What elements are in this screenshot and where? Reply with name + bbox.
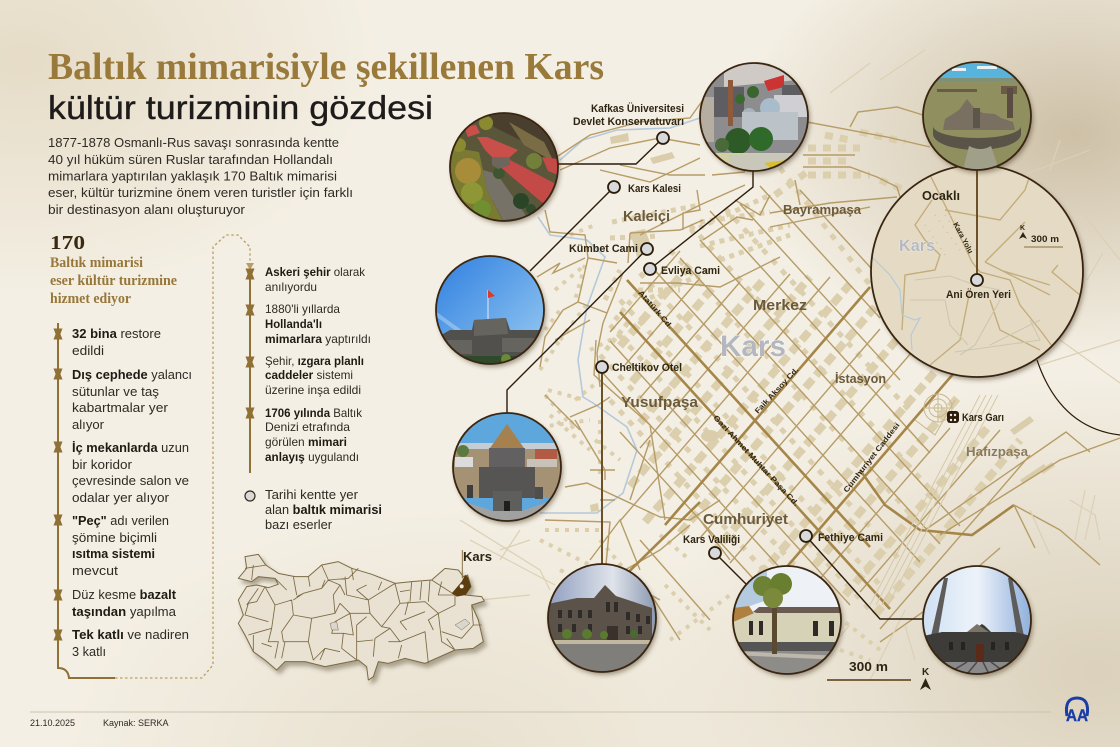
map markers and place labels: Kars Valiliği bbox=[683, 534, 740, 546]
map markers and place labels: Kafkas Üniversitesi bbox=[591, 102, 684, 115]
main street labels: Atatürk Cd. bbox=[636, 288, 675, 331]
right feature list: görülen mimari bbox=[265, 435, 347, 449]
inset circle: Ani map: Ani Ören Yeri bbox=[946, 288, 1011, 301]
right feature list bbox=[265, 265, 371, 464]
connector: Ani bbox=[976, 170, 978, 280]
date and source: Kaynak: SERKA bbox=[103, 718, 169, 728]
legend: alan baltık mimarisi bbox=[265, 502, 382, 517]
footer line bbox=[30, 711, 1051, 713]
subheading: 170: 170 bbox=[50, 232, 85, 254]
scale bar and north arrow: K bbox=[922, 667, 930, 678]
left feature list: Tek katlı ve nadiren bbox=[72, 627, 189, 642]
main street labels bbox=[636, 288, 902, 508]
photo: Kafkas Üniversitesi Devlet Konservatuvarı bbox=[450, 113, 558, 221]
legend: bazı eserler bbox=[265, 517, 333, 532]
Kars province bbox=[452, 575, 471, 597]
left feature list: taşından yapılma bbox=[72, 604, 177, 619]
main street labels: Faik Aksoy Cd. bbox=[753, 365, 800, 415]
inset circle: Ani map bbox=[871, 165, 1083, 377]
right feature list: Hollanda'lı bbox=[265, 317, 322, 331]
photo: Kümbet Cami bbox=[453, 413, 561, 521]
left feature list: edildi bbox=[72, 343, 104, 358]
map markers and place labels bbox=[569, 102, 983, 559]
map markers and place labels: Fethiye Cami bbox=[818, 532, 883, 544]
AA logo: AA bbox=[1066, 706, 1088, 725]
right feature list: caddeler sistemi bbox=[265, 368, 353, 382]
buildings bbox=[520, 132, 1055, 660]
neighbourhood labels bbox=[621, 203, 1029, 528]
inset circle: Ani map: Kara Yolu bbox=[951, 221, 975, 255]
intro paragraph: 40 yıl hüküm süren Ruslar tarafından Hollandalı bbox=[48, 152, 333, 167]
frame: dashed and solid timeline border bbox=[58, 235, 254, 678]
inset labels: Ocaklı bbox=[922, 188, 960, 203]
inset circle: Ani map: Kars bbox=[899, 236, 935, 255]
map markers and place labels: Evliya Cami bbox=[661, 265, 720, 277]
left feature list: alıyor bbox=[72, 417, 105, 432]
subheading: 170: eser kültür turizmine bbox=[50, 273, 177, 289]
main street labels: Gazi Ahmet Muhtar Paşa Cd. bbox=[712, 413, 801, 508]
left feature list: sütunlar ve taş bbox=[72, 384, 160, 399]
list markers bbox=[54, 268, 254, 640]
right feature list: anılıyordu bbox=[265, 280, 317, 294]
right feature list: 1706 yılında Baltık bbox=[265, 406, 363, 420]
neighbourhood labels: Yusufpaşa bbox=[621, 394, 699, 411]
subheading: 170: hizmet ediyor bbox=[50, 291, 131, 307]
legend bbox=[245, 487, 382, 532]
photo: Cheltikov Otel bbox=[548, 564, 656, 672]
scale bar and north arrow: 300 m bbox=[849, 659, 888, 674]
right feature list: üzerine inşa edildi bbox=[265, 383, 361, 397]
inset north and scale: K bbox=[1020, 225, 1025, 232]
intro paragraph: bir destinasyon alanı oluşturuyor bbox=[48, 202, 246, 217]
left feature list: İç mekanlarda uzun bbox=[72, 440, 189, 455]
photo: Kars Valiliği bbox=[733, 566, 841, 674]
left feature list: bir koridor bbox=[72, 457, 133, 472]
left feature list: 32 bina restore bbox=[72, 326, 161, 341]
map markers and place labels: Kümbet Cami bbox=[569, 243, 638, 255]
neighbourhood labels: İstasyon bbox=[835, 371, 886, 386]
map markers and place labels: Kars Kalesi bbox=[628, 183, 681, 195]
date and source bbox=[30, 718, 169, 728]
main street labels: Cumhuriyet Caddesi bbox=[841, 421, 902, 494]
neighbourhood labels: Merkez bbox=[753, 297, 807, 314]
left feature list: kabartmalar yer bbox=[72, 400, 169, 415]
photo: Fethiye Cami bbox=[923, 566, 1031, 674]
AA logo bbox=[1066, 698, 1088, 725]
Kars locator label: Kars bbox=[463, 549, 492, 564]
left feature list: 3 katlı bbox=[72, 644, 106, 659]
scale bar and north arrow bbox=[827, 659, 931, 690]
photo: Ani Ören Yeri bbox=[923, 62, 1031, 170]
left feature list: çevresinde salon ve bbox=[72, 473, 189, 488]
subheading: 170: Baltık mimarisi bbox=[50, 255, 143, 271]
left feature list: "Peç" adı verilen bbox=[72, 513, 169, 528]
left feature list: odalar yer alıyor bbox=[72, 490, 170, 505]
neighbourhood labels: Hafızpaşa bbox=[966, 445, 1029, 459]
station marker bbox=[947, 411, 1004, 424]
faint roads bbox=[460, 50, 1120, 680]
station marker: Kars Garı bbox=[962, 412, 1004, 424]
street map bbox=[460, 50, 1120, 680]
intro paragraph: 1877-1878 Osmanlı-Rus savaşı sonrasında kentte bbox=[48, 135, 339, 150]
right feature list: 1880'li yıllarda bbox=[265, 302, 340, 316]
intro paragraph: mimarlara yaptırılan yaklaşık 170 Baltık mimarisi bbox=[48, 168, 337, 184]
date and source: 21.10.2025 bbox=[30, 718, 75, 728]
intro paragraph: eser, kültür turizmine önem veren turistler için farklı bbox=[48, 185, 353, 200]
neighbourhood labels: Kars bbox=[720, 330, 786, 363]
map markers and place labels: Devlet Konservatuvarı bbox=[573, 116, 684, 128]
right feature list: anlayış uygulandı bbox=[265, 450, 359, 464]
river bbox=[538, 118, 700, 513]
neighbourhood labels: Cumhuriyet bbox=[703, 511, 788, 528]
left feature list: ısıtma sistemi bbox=[72, 546, 155, 561]
dark arc of second map window bbox=[1037, 360, 1120, 435]
left feature list bbox=[72, 326, 192, 659]
left feature list: Düz kesme bazalt bbox=[72, 587, 177, 602]
right feature list: mimarlara yaptırıldı bbox=[265, 332, 371, 346]
map markers and place labels: Cheltikov Otel bbox=[612, 362, 682, 374]
left feature list: şömine biçimli bbox=[72, 530, 157, 545]
title: Baltık mimarisiyle şekillenen Kars bbox=[48, 46, 604, 88]
legend: Tarihi kentte yer bbox=[265, 487, 359, 502]
lakes bbox=[330, 619, 470, 630]
neighbourhood labels: Bayrampaşa bbox=[783, 203, 862, 217]
title: kültür turizminin gözdesi bbox=[48, 89, 433, 126]
intro paragraph bbox=[48, 135, 353, 217]
left feature list: mevcut bbox=[72, 563, 118, 578]
inset north and scale bbox=[1019, 225, 1063, 247]
right feature list: Askeri şehir olarak bbox=[265, 265, 366, 279]
title bbox=[48, 46, 604, 126]
neighbourhood labels: Kaleiçi bbox=[623, 208, 670, 225]
right feature list: Şehir, ızgara planlı bbox=[265, 354, 364, 368]
photo: Kars Kalesi bbox=[436, 256, 544, 364]
subheading: 170 bbox=[50, 232, 177, 307]
connector lines bbox=[507, 138, 925, 619]
secondary roads bbox=[600, 186, 1030, 629]
Turkey locator map bbox=[238, 550, 484, 680]
photo: Evliya Cami bbox=[700, 63, 808, 171]
right feature list: Denizi etrafında bbox=[265, 420, 350, 434]
left feature list: Dış cephede yalancı bbox=[72, 367, 192, 382]
inset north and scale: 300 m bbox=[1031, 234, 1059, 245]
